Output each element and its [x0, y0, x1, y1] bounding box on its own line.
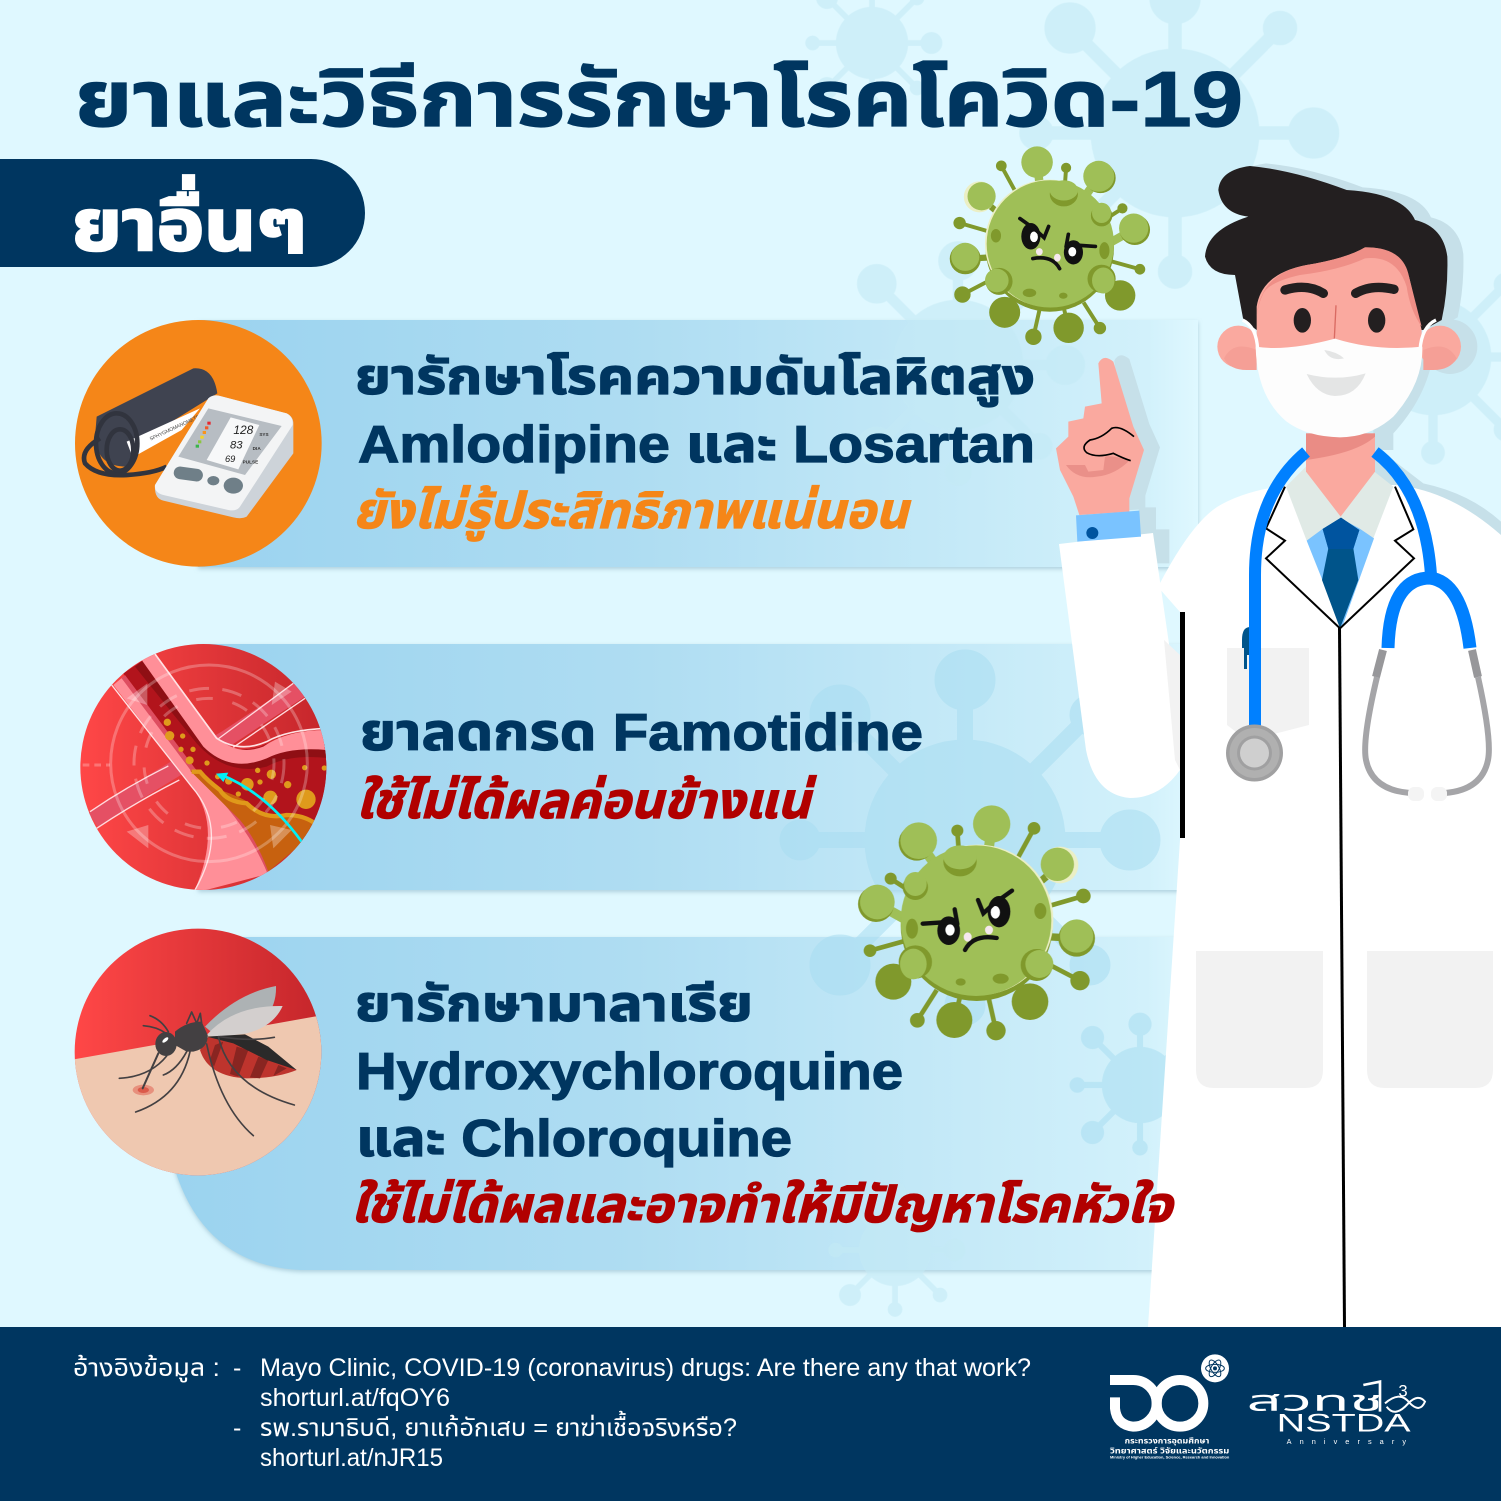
cuff button: [1086, 527, 1098, 539]
logo: NSTDA anniversary: Anniversary: [1287, 1437, 1406, 1446]
pen: [1242, 627, 1250, 669]
references text: shorturl.at/fqOY6: [260, 1384, 450, 1412]
neck: [1306, 433, 1375, 517]
icon: blood pressure monitor: 83: [230, 439, 243, 451]
tie: [1322, 518, 1359, 628]
title: ยาและวิธีการรักษาโรคโควิด-19: [75, 55, 1243, 143]
stethoscope tube left: [1255, 452, 1306, 730]
logo: ministry: [1109, 1354, 1229, 1460]
nose line: [1334, 305, 1336, 339]
text block: malaria drugs: ใช้ไม่ได้ผลและอาจทำให้มีปัญหาโรคหัวใจ: [351, 1177, 1175, 1233]
hand shadow and crease: [1066, 428, 1134, 477]
head, collar and hand: [1056, 166, 1461, 628]
eyes: [1294, 308, 1385, 333]
icon: blood pressure monitor: [75, 320, 322, 567]
footer band: [0, 1327, 1501, 1501]
mask straps: [1243, 320, 1436, 350]
logo: NSTDA anniversary: [1247, 1382, 1425, 1446]
references text: Mayo Clinic, COVID-19 (coronavirus) drugs: Are there any that work?: [260, 1354, 1031, 1382]
text block: hypertension drugs: ยารักษาโรคความดันโลหิตสูง: [355, 349, 1035, 407]
references text: -: [233, 1354, 241, 1382]
lower pocket left: [1196, 951, 1323, 1088]
hand: [1056, 358, 1144, 515]
icon: blood pressure monitor: 128: [233, 423, 254, 437]
references text: -: [233, 1414, 241, 1442]
shirt: [1307, 518, 1374, 628]
logo: ministry: กระทรวงการอุดมศึกษา: [1125, 1435, 1209, 1445]
mask smile and nose: [1307, 350, 1366, 396]
panel: famotidine band: [198, 644, 1198, 890]
breast pocket: [1227, 648, 1309, 735]
doctor illustration: [1056, 163, 1501, 1327]
sleeve shadow: [1164, 640, 1180, 770]
text block: hypertension drugs: ยังไม่รู้ประสิทธิภาพแน่นอน: [353, 483, 912, 542]
coat sleeve: [1059, 533, 1180, 798]
doctor shadow: [1072, 163, 1501, 563]
icon: mosquito biting skin: [70, 929, 323, 1180]
references text: [73, 1354, 1031, 1472]
eyebrows: [1285, 287, 1394, 293]
icon: blood pressure monitor: SYS: [259, 432, 269, 437]
face: [1257, 247, 1422, 350]
neck shadow: [1306, 433, 1375, 460]
icon: blood pressure monitor: PULSE: [243, 459, 258, 464]
panel: hypertension band: [198, 320, 1198, 567]
shirt cuff: [1076, 511, 1141, 542]
text block: malaria drugs: Hydroxychloroquine: [356, 1043, 903, 1101]
ears: [1217, 326, 1461, 370]
heading pill: other drugs: [0, 159, 365, 267]
icon: blood pressure monitor: 69: [225, 454, 235, 464]
virus character: middle: [858, 805, 1095, 1040]
text block: malaria drugs: และ Chloroquine: [356, 1110, 792, 1168]
virus character: top: [950, 146, 1150, 345]
references text: อ้างอิงข้อมูล :: [73, 1354, 220, 1383]
text block: hypertension drugs: Amlodipine และ Losartan: [358, 416, 1035, 474]
mask: [1256, 339, 1422, 437]
text block: famotidine: ยาลดกรด Famotidine: [360, 704, 923, 762]
background virus in lower panels: [780, 650, 1214, 1155]
coat seam lines: [1182, 612, 1344, 1327]
stethoscope ear tubes: [1365, 578, 1489, 801]
logo: ministry: Ministry of Higher Education, Science, Research and Innovation: [1110, 1456, 1229, 1460]
logo: NSTDA anniversary: 3: [1398, 1382, 1408, 1401]
lapels: [1266, 487, 1414, 628]
collar: [1286, 467, 1393, 541]
icon: blood pressure monitor: DIA: [253, 446, 261, 451]
references text: รพ.รามาธิบดี, ยาแก้อักเสบ = ยาฆ่าเชื้อจริงหรือ?: [260, 1410, 737, 1442]
text block: famotidine: [356, 704, 923, 829]
text block: hypertension drugs: [353, 349, 1035, 542]
icon: blood pressure monitor: SPHYGMOMANOMETER: [149, 412, 204, 442]
background virus pattern: [805, 0, 1501, 1317]
icon: artery with plaque: [80, 644, 330, 893]
heading pill: other drugs: ยาอื่นๆ: [72, 175, 307, 266]
tie knot: [1323, 518, 1359, 549]
references text: shorturl.at/nJR15: [260, 1444, 443, 1472]
forehead shadow: [1257, 247, 1422, 327]
text block: malaria drugs: [351, 976, 1175, 1233]
logo: NSTDA anniversary: NSTDA: [1277, 1411, 1412, 1438]
text block: famotidine: ใช้ไม่ได้ผลค่อนข้างแน่: [356, 773, 817, 829]
hair: [1205, 166, 1447, 330]
text block: malaria drugs: ยารักษามาลาเรีย: [355, 976, 753, 1032]
logo: ministry: วิทยาศาสตร์ วิจัยและนวัตกรรม: [1109, 1446, 1229, 1455]
panel: malaria drugs band: [175, 937, 1198, 1270]
stethoscope tube right: [1375, 452, 1431, 575]
logo: NSTDA anniversary: สวทช: [1247, 1386, 1383, 1418]
coat body: [1148, 485, 1501, 1327]
lower pocket right: [1367, 951, 1493, 1088]
stethoscope chest piece: [1226, 724, 1283, 782]
